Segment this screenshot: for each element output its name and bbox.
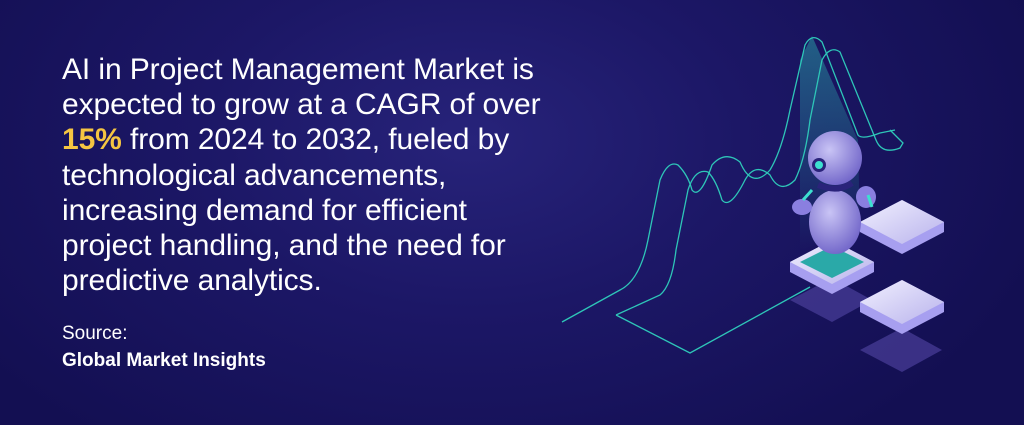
main text block: expected to grow at a CAGR of over <box>62 88 541 121</box>
main text block: 15% from 2024 to 2032, fueled by <box>62 123 509 156</box>
main text block: project handling, and the need for <box>62 229 506 262</box>
tiles <box>790 200 944 372</box>
main text block: increasing demand for efficient <box>62 194 467 227</box>
chart glow <box>800 36 860 250</box>
chart line front <box>562 38 895 322</box>
main text block <box>62 53 541 297</box>
source: Source: <box>62 323 127 344</box>
main text block: predictive analytics. <box>62 264 322 297</box>
source <box>62 323 266 371</box>
robot <box>792 131 876 254</box>
chart line back <box>616 50 903 353</box>
main text block: technological advancements, <box>62 159 446 192</box>
main text block: AI in Project Management Market is <box>62 53 534 86</box>
source: Global Market Insights <box>62 350 266 371</box>
